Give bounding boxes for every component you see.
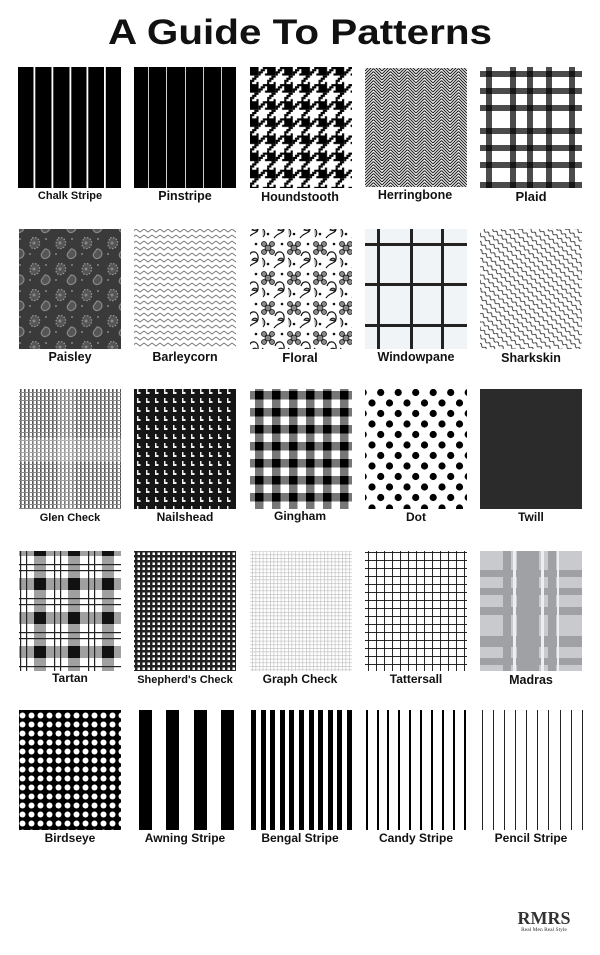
panel: barleycorn: Barleycorn xyxy=(152,350,218,364)
panel: windowpane xyxy=(365,229,467,364)
panel: shepherd's check: Shepherd's Check xyxy=(137,674,234,686)
panel: houndstooth: Houndstooth xyxy=(261,190,339,204)
panel: tattersall xyxy=(365,551,467,686)
title: A Guide To Patterns xyxy=(108,13,492,52)
panel: tartan xyxy=(19,551,121,685)
panel: herringbone xyxy=(365,68,467,202)
panel: plaid: Plaid xyxy=(515,189,547,204)
panel: glen check xyxy=(19,389,121,524)
panel: twill: Twill xyxy=(518,510,544,524)
panel: birdseye xyxy=(19,710,121,845)
panel: windowpane: Windowpane xyxy=(378,350,455,364)
panel: pencil stripe xyxy=(482,710,583,845)
panel: bengal stripe xyxy=(251,710,352,845)
panel: gingham xyxy=(250,389,352,523)
panel: floral xyxy=(250,229,352,365)
panel: madras: Madras xyxy=(509,673,553,687)
panel: candy stripe xyxy=(366,710,466,845)
panel: madras xyxy=(480,551,582,687)
panel: pinstripe xyxy=(134,67,236,203)
panel: graph check: Graph Check xyxy=(263,672,338,686)
panel: dot xyxy=(365,389,467,524)
panel: gingham: Gingham xyxy=(274,509,326,523)
panel: bengal stripe: Bengal Stripe xyxy=(261,831,339,845)
panel: pinstripe: Pinstripe xyxy=(158,189,212,203)
panel: chalk stripe xyxy=(18,67,121,202)
panel: sharkskin: Sharkskin xyxy=(501,351,561,365)
panel: awning stripe: Awning Stripe xyxy=(145,831,226,845)
panel: nailshead: Nailshead xyxy=(157,510,213,524)
panel: tartan: Tartan xyxy=(52,671,88,685)
panel: sharkskin xyxy=(480,229,582,365)
panel: tattersall: Tattersall xyxy=(390,672,442,686)
panel: barleycorn xyxy=(134,229,236,364)
panel: nailshead xyxy=(134,389,236,524)
panel: graph check xyxy=(250,551,352,686)
panel: dot: Dot xyxy=(406,510,426,524)
panel: paisley xyxy=(19,229,121,364)
panel: shepherd's check xyxy=(134,551,236,686)
panel: chalk stripe: Chalk Stripe xyxy=(38,190,102,202)
panel: houndstooth xyxy=(250,67,352,204)
panel: birdseye: Birdseye xyxy=(45,831,96,845)
panel: awning stripe xyxy=(139,710,234,845)
panel: pencil stripe: Pencil Stripe xyxy=(495,831,568,845)
logo: RMRS: Real Men Real Style xyxy=(521,927,567,933)
panel: paisley: Paisley xyxy=(48,350,92,364)
panel: plaid xyxy=(480,67,582,204)
panel: glen check: Glen Check xyxy=(40,512,101,524)
logo: RMRS: RMRS xyxy=(518,908,570,928)
panel: floral: Floral xyxy=(282,350,318,365)
panel: herringbone: Herringbone xyxy=(378,188,452,202)
panel: candy stripe: Candy Stripe xyxy=(379,831,453,845)
panel: twill xyxy=(480,389,582,524)
